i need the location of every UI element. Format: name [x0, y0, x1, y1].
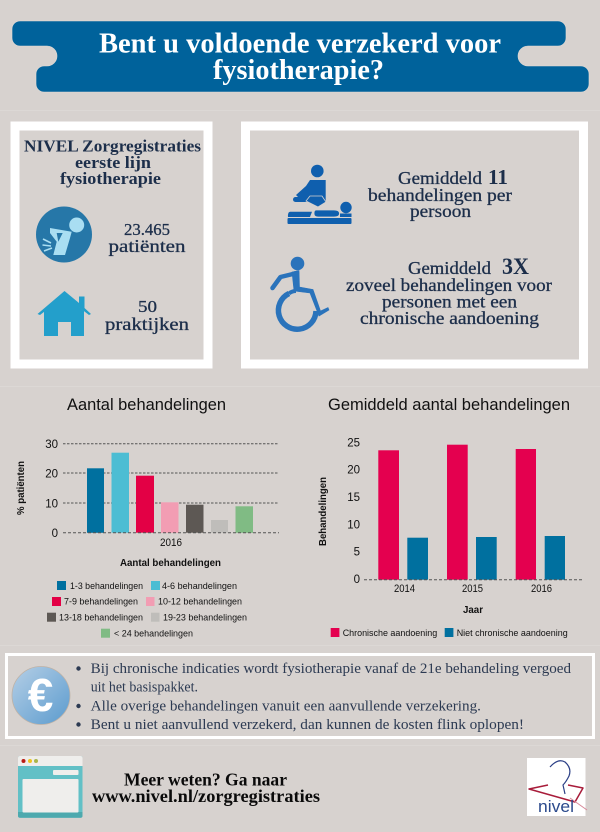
text: average 11 treatments: behandelingen per: [368, 185, 512, 205]
practice count: 50: [138, 297, 157, 316]
bullet list: Bij chronische indicaties wordt fysiotherapie vanaf de 21e behandeling vergoed: [91, 661, 571, 677]
year labels and axis titles: 2016: [531, 583, 552, 595]
call to action: www.nivel.nl/zorgregistraties: [92, 786, 320, 806]
legend: 10-12 behandelingen: [158, 596, 242, 608]
bar chart: number of treatments: [16, 395, 279, 640]
legend: < 24 behandelingen: [114, 628, 193, 640]
call to action: Meer weten? Ga naar: [124, 770, 287, 790]
category and axis titles: 2016: [160, 537, 182, 549]
icon: massage therapist: [288, 165, 352, 224]
icon: wheelchair: [272, 257, 329, 329]
patient count: 23.465: [124, 220, 170, 239]
legend: 1-3 behandelingen: [70, 581, 143, 592]
text: average 11 treatments: persoon: [410, 201, 471, 221]
legend: Chronische aandoening: [343, 628, 437, 639]
axis labels: 0: [354, 574, 360, 586]
text: average 3x treatments: Gemiddeld: [408, 258, 491, 278]
panel: average treatments: [246, 126, 584, 364]
legend: [47, 581, 247, 640]
logo: nivel: nivel: [538, 797, 574, 816]
bars: [87, 453, 253, 533]
legend: 13-18 behandelingen: [59, 612, 143, 624]
panel: reimbursement notes: [6, 654, 594, 738]
axis labels: 25: [347, 438, 360, 450]
legend: [331, 628, 568, 639]
bullet list: [76, 661, 571, 733]
panel heading: [24, 136, 201, 188]
bar chart: average treatments: [318, 395, 582, 639]
axis labels: 0: [52, 528, 58, 540]
axis labels: 20: [45, 468, 58, 480]
chart title: Aantal behandelingen: [67, 395, 226, 414]
legend: 4-6 behandelingen: [162, 581, 237, 592]
year labels and axis titles: [318, 477, 552, 616]
text: average 11 treatments: 11: [488, 165, 508, 189]
title banner: [12, 21, 589, 92]
title text: fysiotherapie?: [213, 55, 384, 86]
legend: Niet chronische aandoening: [457, 628, 568, 639]
practice count: praktijken: [105, 314, 189, 334]
panel: NIVEL registrations: [15, 126, 208, 364]
category and axis titles: Aantal behandelingen: [120, 558, 221, 569]
text: average 11 treatments: [368, 165, 512, 221]
legend: 19-23 behandelingen: [163, 612, 247, 624]
panel heading: NIVEL Zorgregistraties: [24, 136, 201, 156]
category and axis titles: % patiënten: [16, 461, 27, 515]
bullet list: Bent u niet aanvullend verzekerd, dan kunnen de kosten flink oplopen!: [91, 717, 524, 733]
legend: 7-9 behandelingen: [64, 596, 138, 608]
call to action: [92, 770, 320, 806]
logo: nivel: [527, 758, 587, 816]
bullet list: uit het basispakket.: [91, 680, 198, 696]
bars: [378, 445, 565, 580]
text: average 3x treatments: [346, 254, 552, 328]
text: average 3x treatments: zoveel behandelingen voor: [346, 275, 552, 295]
axis labels: 10: [45, 498, 58, 510]
title text: Bent u voldoende verzekerd voor: [99, 28, 501, 60]
icon: euro coin: [12, 666, 70, 724]
year labels and axis titles: 2014: [394, 583, 415, 595]
axis labels: 20: [347, 464, 360, 476]
year labels and axis titles: 2015: [462, 583, 483, 595]
icon: euro coin: €: [28, 669, 53, 721]
title text: [99, 28, 501, 86]
text: average 3x treatments: chronische aandoening: [360, 308, 539, 328]
year labels and axis titles: Behandelingen: [318, 477, 329, 546]
panel heading: fysiotherapie: [60, 169, 161, 188]
text: average 3x treatments: 3X: [502, 254, 529, 279]
axis labels: 15: [347, 492, 360, 504]
icon: browser window: [18, 756, 82, 818]
axis labels: [45, 439, 58, 540]
axis labels: [347, 438, 360, 586]
patient count: patiënten: [108, 236, 186, 256]
icon: house: [38, 291, 91, 336]
patient count: [108, 220, 186, 256]
icon: back pain: [36, 206, 92, 262]
text: average 11 treatments: Gemiddeld: [398, 168, 482, 188]
axis labels: 30: [45, 439, 58, 451]
chart title: Gemiddeld aantal behandelingen: [328, 395, 570, 414]
axis labels: 5: [354, 546, 360, 558]
text: average 3x treatments: personen met een: [382, 292, 517, 312]
practice count: [105, 297, 189, 334]
panel heading: eerste lijn: [75, 153, 152, 172]
axis labels: 10: [347, 520, 360, 532]
bullet list: Alle overige behandelingen vanuit een aanvullende verzekering.: [91, 699, 481, 715]
year labels and axis titles: Jaar: [463, 605, 483, 616]
category and axis titles: [16, 461, 221, 569]
